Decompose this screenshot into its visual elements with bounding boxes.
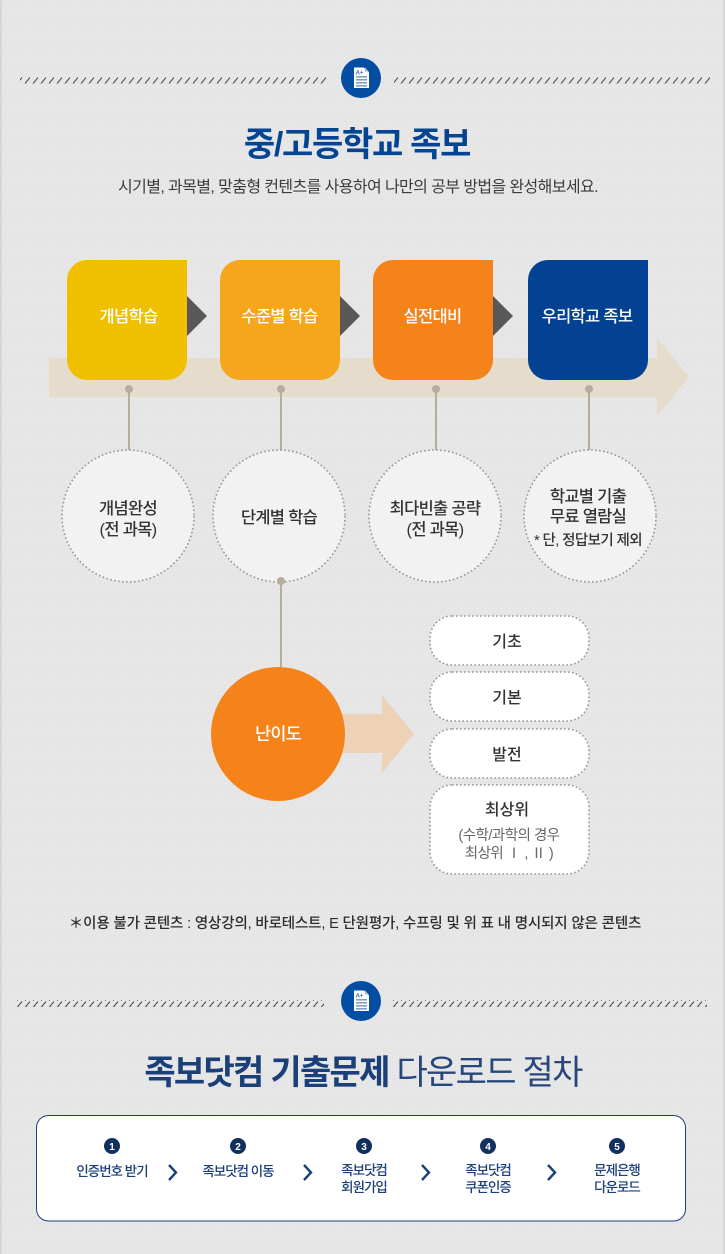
circle: 난이도 [211, 667, 345, 801]
step 1 [76, 1138, 148, 1179]
chevron 3 [422, 1165, 429, 1180]
step box: 개념학습: 개념학습 [100, 307, 158, 326]
circle: 개념완성: 개념완성 [99, 499, 157, 518]
step 4 [465, 1138, 511, 1195]
step 5: 문제은행 [594, 1163, 640, 1178]
connector 3 [432, 385, 440, 450]
pill: 기초 [430, 616, 589, 665]
pill: 최상위: 최상위 [485, 801, 529, 819]
icon: document top [341, 58, 381, 98]
step 5: 다운로드 [594, 1180, 640, 1195]
circle: 단계별 학습 [213, 450, 345, 582]
chevron 4 [548, 1165, 555, 1180]
step 2 [202, 1138, 274, 1179]
pill: 발전 [430, 729, 589, 778]
timeline arrow [49, 338, 689, 416]
step 4: 쿠폰인증 [465, 1180, 511, 1195]
step box: 실전대비 [373, 260, 493, 380]
section divider bottom [17, 981, 707, 1021]
circle: 개념완성 [62, 450, 194, 582]
circle: 단계별 학습: 단계별 학습 [241, 508, 318, 527]
step box: 수준별 학습 [220, 260, 340, 380]
circle: 난이도: 난이도 [255, 724, 302, 744]
step arrow 1 [187, 296, 207, 336]
pill: 기본 [430, 672, 589, 721]
step arrow 2 [340, 296, 360, 336]
step 1: 1 [109, 1142, 115, 1153]
step 2: 족보닷컴 이동 [202, 1164, 274, 1179]
step 3 [341, 1138, 387, 1195]
step box: 개념학습 [67, 260, 187, 380]
section divider top [20, 58, 710, 98]
connector to difficulty [277, 577, 285, 669]
step box: 우리학교 족보: 우리학교 족보 [542, 307, 633, 326]
pill: 발전: 발전 [492, 746, 522, 764]
connector 2 [277, 385, 285, 450]
circle: 학교별 기출: 무료 열람실 [550, 507, 626, 526]
circle: 개념완성: (전 과목) [100, 520, 157, 539]
circle: 학교별 기출: 학교별 기출 [550, 487, 627, 506]
step box: 우리학교 족보 [528, 260, 648, 380]
step 1: 인증번호 받기 [76, 1164, 148, 1179]
title: 중/고등학교 족보 [244, 126, 470, 164]
circle: 최다빈출 공략: (전 과목) [407, 520, 464, 539]
circle: 최다빈출 공략 [369, 450, 501, 582]
icon: document top: A+ [356, 70, 364, 76]
circle: 학교별 기출 [524, 450, 656, 582]
step 4: 족보닷컴 [465, 1163, 511, 1178]
step 3: 회원가입 [341, 1180, 387, 1195]
step arrow 3 [493, 296, 513, 336]
step 3: 3 [361, 1142, 367, 1153]
step 4: 4 [485, 1142, 491, 1153]
pill: 최상위: 최상위 Ⅰ , Ⅱ ) [465, 845, 553, 862]
step 5: 5 [614, 1142, 620, 1153]
panel: download steps [36, 1116, 686, 1221]
step box: 수준별 학습: 수준별 학습 [241, 307, 318, 326]
connector 4 [585, 385, 593, 450]
step 3: 족보닷컴 [341, 1163, 387, 1178]
step 5 [594, 1138, 640, 1195]
icon: document bottom: A+ [356, 994, 364, 1000]
icon: document bottom [341, 981, 381, 1021]
subtitle: 시기별, 과목별, 맞춤형 컨텐츠를 사용하여 나만의 공부 방법을 완성해보세요. [118, 178, 598, 196]
connector 1 [125, 385, 133, 450]
pill: 최상위: (수학/과학의 경우 [458, 827, 560, 844]
pill: 최상위 [430, 785, 589, 874]
note: ＊이용 불가 콘텐츠 : 영상강의, 바로테스트, E 단원평가, 수프링 및 위 표 내 명시되지 않은 콘텐츠 [69, 915, 641, 932]
difficulty arrow [340, 695, 414, 773]
pill: 기본: 기본 [492, 689, 522, 707]
circle: 학교별 기출: * 단, 정답보기 제외 [534, 532, 642, 549]
chevron 2 [304, 1165, 311, 1180]
circle: 최다빈출 공략: 최다빈출 공략 [390, 499, 481, 518]
step box: 실전대비: 실전대비 [404, 307, 461, 326]
chevron 1 [169, 1165, 176, 1180]
section heading: 족보닷컴 기출문제 다운로드 절차 [144, 1054, 583, 1092]
step 2: 2 [235, 1142, 241, 1153]
pill: 기초: 기초 [492, 633, 522, 651]
